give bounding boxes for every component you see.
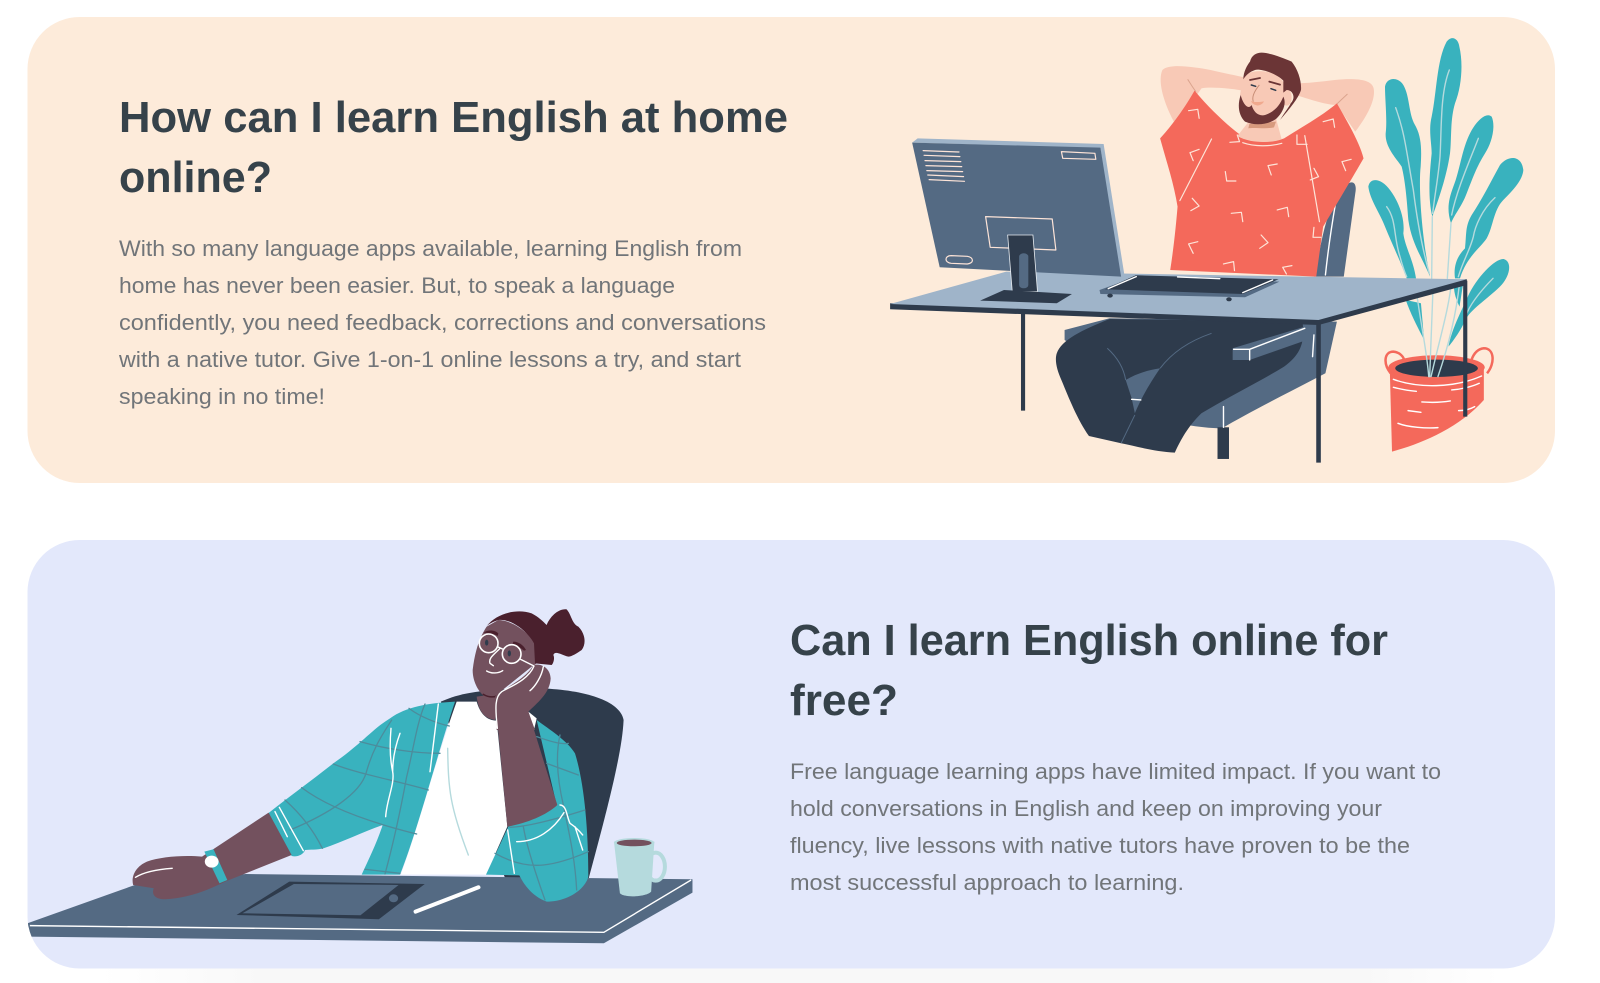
- chair back: [1314, 182, 1356, 277]
- text block: learn for free body: [790, 759, 1441, 895]
- icon: computer monitor: [912, 138, 1125, 303]
- heading: learn for free: Can I learn English online for: [790, 616, 1388, 665]
- text block: learn at home body: [118, 236, 766, 409]
- text block: learn for free body: Free language learning apps have limited impact. If you want to: [790, 759, 1441, 784]
- icon: woman head: [473, 609, 585, 730]
- heading: learn for free: free?: [790, 676, 898, 725]
- panel: learn for free: [28, 540, 1555, 968]
- text block: learn at home body: speaking in no time!: [119, 384, 325, 409]
- illustration: woman thinking at desk: [28, 609, 692, 943]
- panel: learn at home: [28, 17, 1555, 483]
- text block: learn for free body: fluency, live lessons with native tutors have proven to be the: [790, 833, 1410, 858]
- heading: learn for free: [790, 616, 1388, 725]
- icon: plant leaves: [1368, 38, 1523, 278]
- illustration: man relaxing at desk: [890, 38, 1523, 463]
- text block: learn at home body: with a native tutor. Give 1-on-1 online lessons a try, and start: [118, 347, 741, 372]
- icon: desk: [890, 272, 1467, 325]
- text block: learn at home body: With so many language apps available, learning English from: [119, 236, 742, 261]
- heading: learn at home: [119, 93, 788, 202]
- text block: learn for free body: hold conversations in English and keep on improving your: [790, 796, 1382, 821]
- icon: drawing tablet: [1099, 275, 1280, 301]
- icon: tablet: [236, 882, 425, 919]
- desk legs: [1021, 281, 1467, 463]
- icon: stylus pen: [416, 887, 478, 912]
- icon: lower plant leaves: [1406, 259, 1509, 347]
- icon: coffee mug: [614, 838, 665, 896]
- icon: desk: [28, 874, 692, 943]
- icon: forearm, hand and watch: [133, 813, 292, 899]
- heading: learn at home: How can I learn English at home: [119, 93, 788, 142]
- icon: man shirt: [1160, 91, 1364, 277]
- text block: learn at home body: confidently, you need feedback, corrections and conversations: [119, 310, 766, 335]
- icon: woman shirt and tee: [267, 702, 588, 902]
- heading: learn at home: online?: [119, 153, 272, 202]
- icon: chair back: [441, 688, 624, 878]
- icon: flower pot: [1386, 280, 1493, 452]
- text block: learn at home body: home has never been easier. But, to speak a language: [119, 273, 675, 298]
- icon: man head: [1237, 53, 1301, 142]
- icon: office chair and legs: [1056, 318, 1337, 459]
- icon: man arms: [1161, 66, 1374, 132]
- icon: resting arm: [494, 690, 557, 827]
- text block: learn for free body: most successful approach to learning.: [790, 870, 1184, 895]
